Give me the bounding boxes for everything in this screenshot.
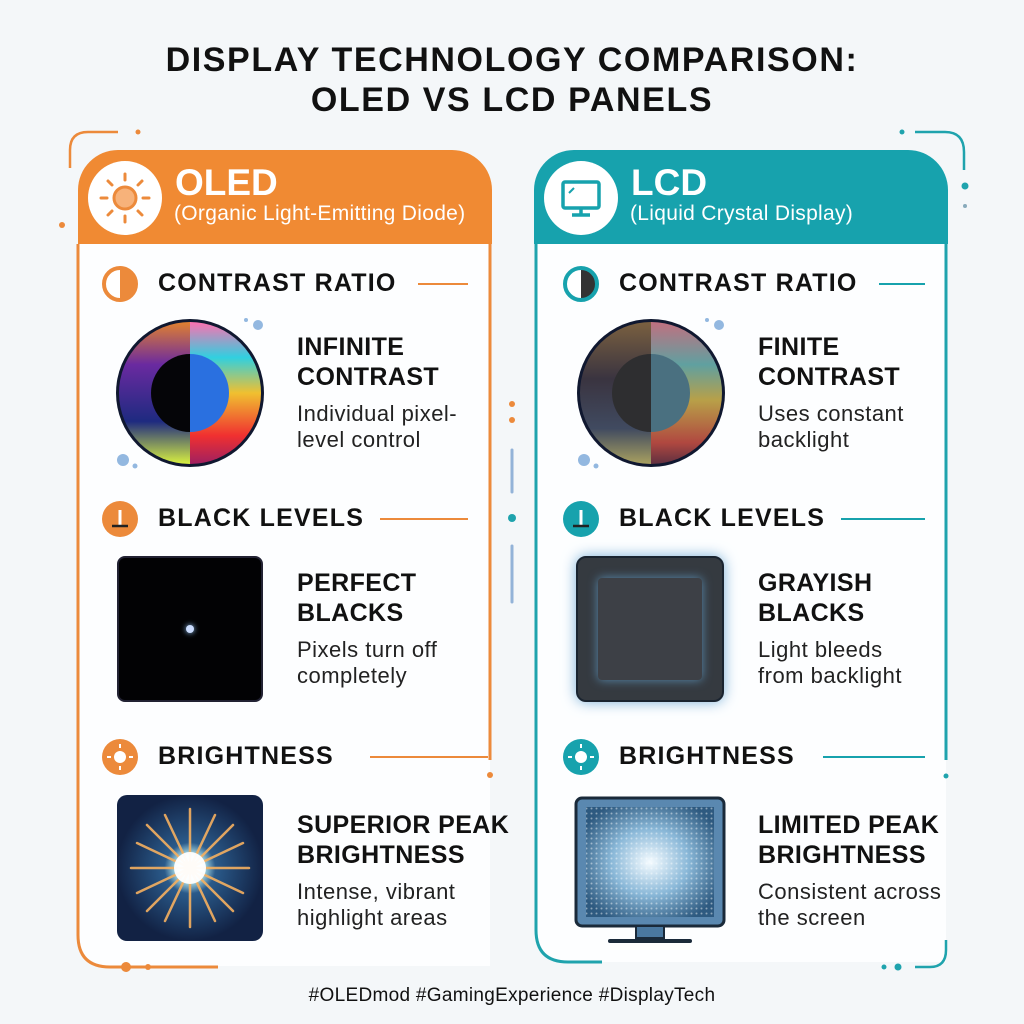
text: superior peak: SUPERIOR PEAK xyxy=(297,811,509,839)
text: limited peak: Consistent across xyxy=(758,879,941,904)
section: OLED brightness: BRIGHTNESS xyxy=(158,742,334,770)
section: LCD brightness xyxy=(563,739,925,775)
hashtags: #OLEDmod #GamingExperience #DisplayTech xyxy=(309,985,715,1006)
text: grayish blacks xyxy=(758,569,902,688)
title: OLED VS LCD PANELS xyxy=(311,81,713,119)
image: monitor xyxy=(574,796,726,943)
text: finite contrast xyxy=(758,333,904,452)
card body backgrounds xyxy=(78,244,490,966)
panel: LCD header xyxy=(534,150,948,244)
image: finite contrast wheel xyxy=(577,318,725,468)
title: DISPLAY TECHNOLOGY COMPARISON: xyxy=(166,41,858,79)
text: infinite contrast: INFINITE xyxy=(297,333,404,361)
section: LCD contrast: CONTRAST RATIO xyxy=(619,269,858,297)
text: superior peak xyxy=(297,811,509,930)
text: grayish blacks: Light bleeds xyxy=(758,637,883,662)
section: LCD black levels xyxy=(563,501,925,537)
text: perfect blacks: Pixels turn off xyxy=(297,637,437,662)
panel: LCD header: (Liquid Crystal Display) xyxy=(630,202,853,225)
text: infinite contrast: level control xyxy=(297,427,421,452)
image: infinite contrast wheel xyxy=(116,318,264,468)
title xyxy=(166,41,858,119)
icon: sun xyxy=(88,161,162,235)
text: limited peak: the screen xyxy=(758,905,866,930)
text: finite contrast: backlight xyxy=(758,427,849,452)
text: perfect blacks: BLACKS xyxy=(297,599,404,627)
text: limited peak: BRIGHTNESS xyxy=(758,841,926,869)
text: perfect blacks: completely xyxy=(297,663,407,688)
image: perfect black square xyxy=(117,556,263,702)
text: perfect blacks xyxy=(297,569,437,688)
section: OLED contrast: CONTRAST RATIO xyxy=(158,269,397,297)
text: finite contrast: CONTRAST xyxy=(758,363,900,391)
section: OLED black levels: BLACK LEVELS xyxy=(158,504,364,532)
panel: OLED header: (Organic Light-Emitting Diode) xyxy=(174,202,465,225)
text: superior peak: Intense, vibrant xyxy=(297,879,455,904)
text: superior peak: BRIGHTNESS xyxy=(297,841,465,869)
section: LCD contrast xyxy=(563,266,925,302)
panel: LCD header: LCD xyxy=(631,162,707,203)
panel: OLED header: OLED xyxy=(175,162,278,203)
text: limited peak xyxy=(758,811,941,930)
text: limited peak: LIMITED PEAK xyxy=(758,811,939,839)
text: finite contrast: FINITE xyxy=(758,333,840,361)
text: superior peak: highlight areas xyxy=(297,905,448,930)
section: LCD brightness: BRIGHTNESS xyxy=(619,742,795,770)
section: OLED contrast xyxy=(102,266,468,302)
icon: monitor xyxy=(544,161,618,235)
image: grayish square xyxy=(576,556,724,702)
text: grayish blacks: from backlight xyxy=(758,663,902,688)
text: infinite contrast: Individual pixel- xyxy=(297,401,457,426)
text: infinite contrast: CONTRAST xyxy=(297,363,439,391)
text: grayish blacks: BLACKS xyxy=(758,599,865,627)
section: OLED black levels xyxy=(102,501,468,537)
text: infinite contrast xyxy=(297,333,457,452)
text: grayish blacks: GRAYISH xyxy=(758,569,872,597)
text: finite contrast: Uses constant xyxy=(758,401,904,426)
section: OLED brightness xyxy=(102,739,488,775)
text: perfect blacks: PERFECT xyxy=(297,569,416,597)
section: LCD black levels: BLACK LEVELS xyxy=(619,504,825,532)
panel: OLED header xyxy=(78,150,492,244)
image: starburst xyxy=(117,795,263,941)
